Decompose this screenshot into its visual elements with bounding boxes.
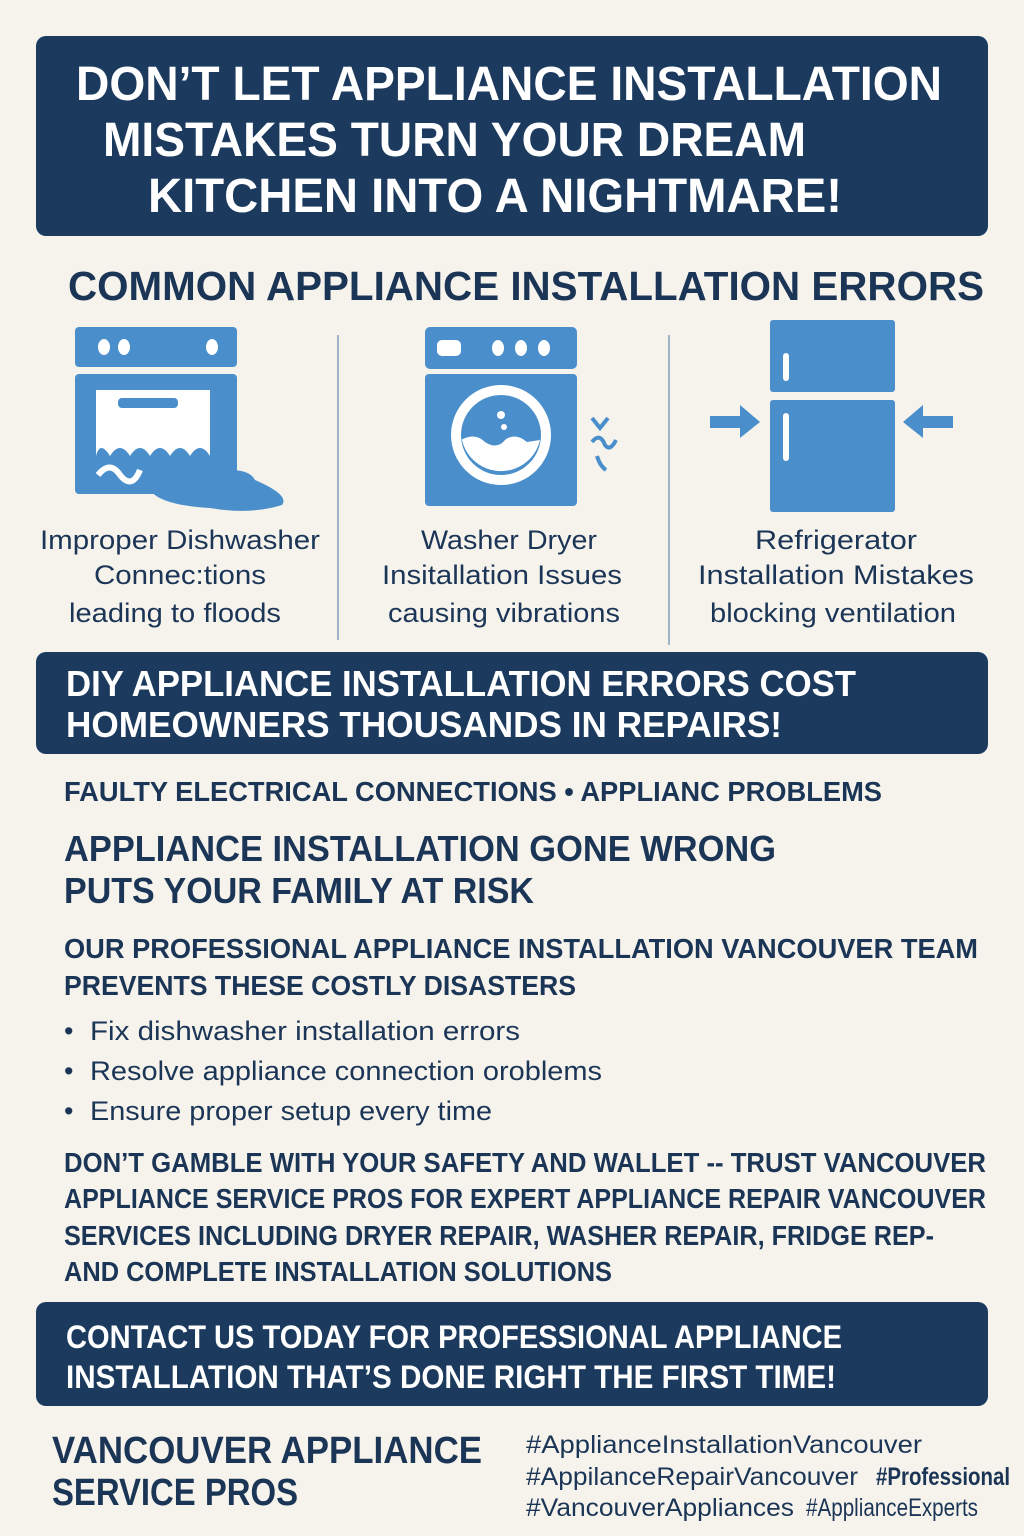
bullet list: • [64, 1056, 73, 1086]
caption: refrigerator: Refrigerator [755, 525, 917, 555]
bullet list: • [64, 1016, 73, 1046]
divider 1 [337, 335, 339, 640]
caption: washer: causing vibrations [388, 598, 620, 628]
caption: washer [382, 525, 622, 628]
caption: dishwasher: Improper Dishwasher [40, 525, 320, 555]
title banner: DON’T LET APPLIANCE INSTALLATION [76, 58, 942, 111]
text: professional team: OUR PROFESSIONAL APPLIANCE INSTALLATION VANCOUVER TEAM [64, 933, 978, 964]
heading: risk [64, 828, 776, 911]
brand name: VANCOUVER APPLIANCE [52, 1430, 482, 1472]
icon: refrigerator with arrows [710, 320, 953, 512]
bullet list: • [64, 1096, 73, 1126]
section heading: common errors: COMMON APPLIANCE INSTALLATION ERRORS [68, 263, 984, 309]
hashtags: #AppilanceRepairVancouver [526, 1463, 858, 1491]
banner: DIY costs: DIY APPLIANCE INSTALLATION ERRORS COST [66, 663, 856, 704]
banner: DIY costs: HOMEOWNERS THOUSANDS IN REPAIRS! [66, 704, 782, 745]
paragraph: trust pros: AND COMPLETE INSTALLATION SOLUTIONS [64, 1256, 612, 1287]
bullet list: Fix dishwasher installation errors [90, 1016, 520, 1046]
bullet list: Ensure proper setup every time [90, 1096, 492, 1126]
paragraph: trust pros: SERVICES INCLUDING DRYER REPAIR, WASHER REPAIR, FRIDGE REP- [64, 1220, 934, 1251]
banner: contact CTA: INSTALLATION THAT’S DONE RIGHT THE FIRST TIME! [66, 1359, 836, 1395]
caption: refrigerator: Installation Mistakes [698, 560, 974, 590]
hashtags: #VancouverAppliances [526, 1494, 794, 1522]
brand name [52, 1430, 482, 1514]
caption: washer: Washer Dryer [421, 525, 597, 555]
caption: refrigerator [698, 525, 974, 628]
heading: risk: PUTS YOUR FAMILY AT RISK [64, 870, 534, 911]
text: professional team: PREVENTS THESE COSTLY DISASTERS [64, 970, 576, 1001]
caption: dishwasher: leading to floods [69, 598, 281, 628]
title banner: KITCHEN INTO A NIGHTMARE! [148, 170, 842, 223]
caption: washer: Insitallation Issues [382, 560, 622, 590]
bullet list [64, 1016, 602, 1126]
divider 2 [668, 335, 670, 645]
icon: leaking dishwasher [75, 327, 283, 511]
caption: dishwasher: Connec:tions [94, 560, 266, 590]
icon: washing machine [425, 327, 616, 506]
hashtags [526, 1431, 1010, 1522]
caption: dishwasher [40, 525, 320, 628]
hashtags: #ApplianceExperts [806, 1494, 978, 1522]
banner: DIY costs [36, 652, 988, 754]
title banner [36, 36, 988, 236]
banner: contact CTA [36, 1302, 988, 1406]
bullet list: Resolve appliance connection oroblems [90, 1056, 602, 1086]
text: professional team [64, 933, 978, 1001]
heading: risk: APPLIANCE INSTALLATION GONE WRONG [64, 828, 776, 869]
brand name: SERVICE PROS [52, 1472, 298, 1514]
caption: refrigerator: blocking ventilation [710, 598, 956, 628]
title banner: MISTAKES TURN YOUR DREAM [103, 114, 806, 167]
paragraph: trust pros [64, 1147, 986, 1287]
banner: contact CTA: CONTACT US TODAY FOR PROFESSIONAL APPLIANCE [66, 1319, 842, 1355]
hashtags: #ApplianceInstallationVancouver [526, 1431, 922, 1459]
text: faulty connections: FAULTY ELECTRICAL CONNECTIONS • APPLIANC PROBLEMS [64, 776, 882, 807]
